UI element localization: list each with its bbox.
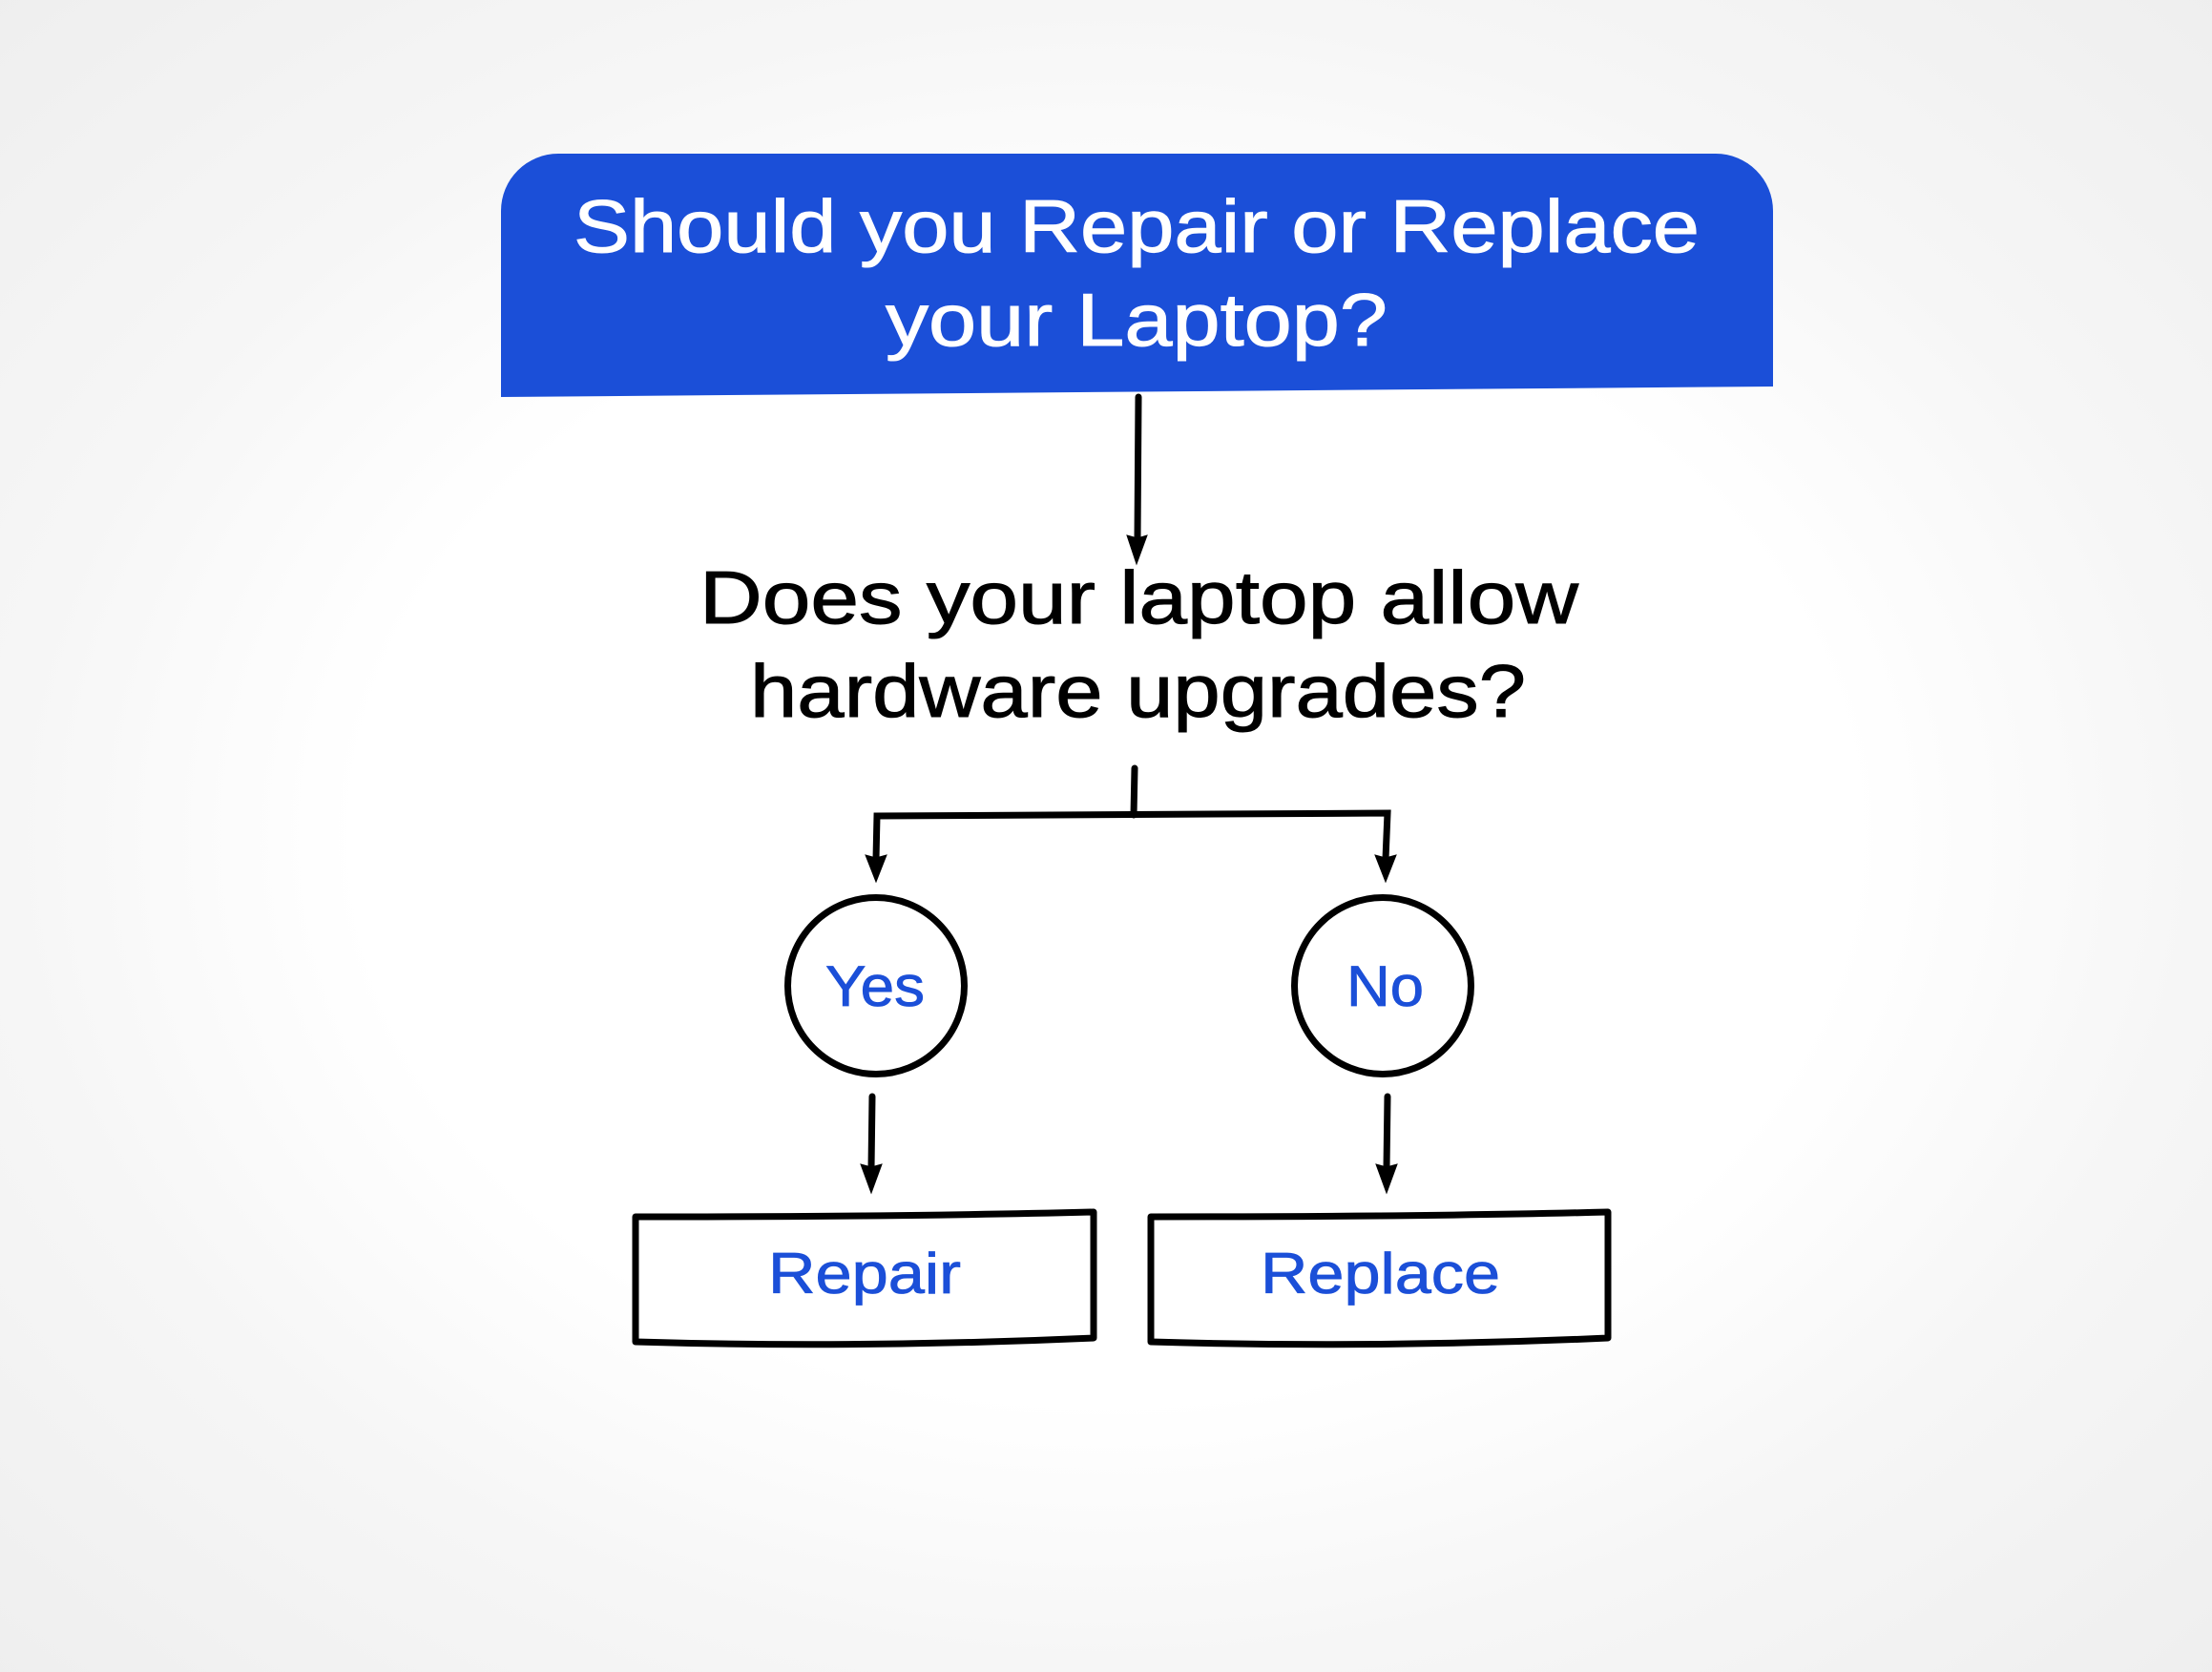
replace box: Replace <box>1261 1242 1500 1306</box>
title banner: your Laptop? <box>886 278 1388 362</box>
branching connector with arrows <box>866 768 1396 882</box>
title banner <box>501 154 1773 397</box>
question text: Does your laptop allow <box>699 555 1579 639</box>
arrow: title to question <box>1127 397 1147 564</box>
question text: hardware upgrades? <box>750 649 1526 733</box>
question text <box>699 555 1579 733</box>
replace box <box>1151 1212 1608 1345</box>
no circle <box>1294 897 1471 1075</box>
repair box <box>636 1212 1094 1345</box>
repair box: Repair <box>768 1242 961 1306</box>
arrow: yes to repair <box>861 1097 882 1193</box>
yes circle: Yes <box>825 954 925 1018</box>
no circle: No <box>1346 954 1424 1018</box>
arrow: no to replace <box>1376 1097 1397 1193</box>
title banner: Should you Repair or Replace <box>574 184 1700 268</box>
yes circle <box>788 897 964 1075</box>
